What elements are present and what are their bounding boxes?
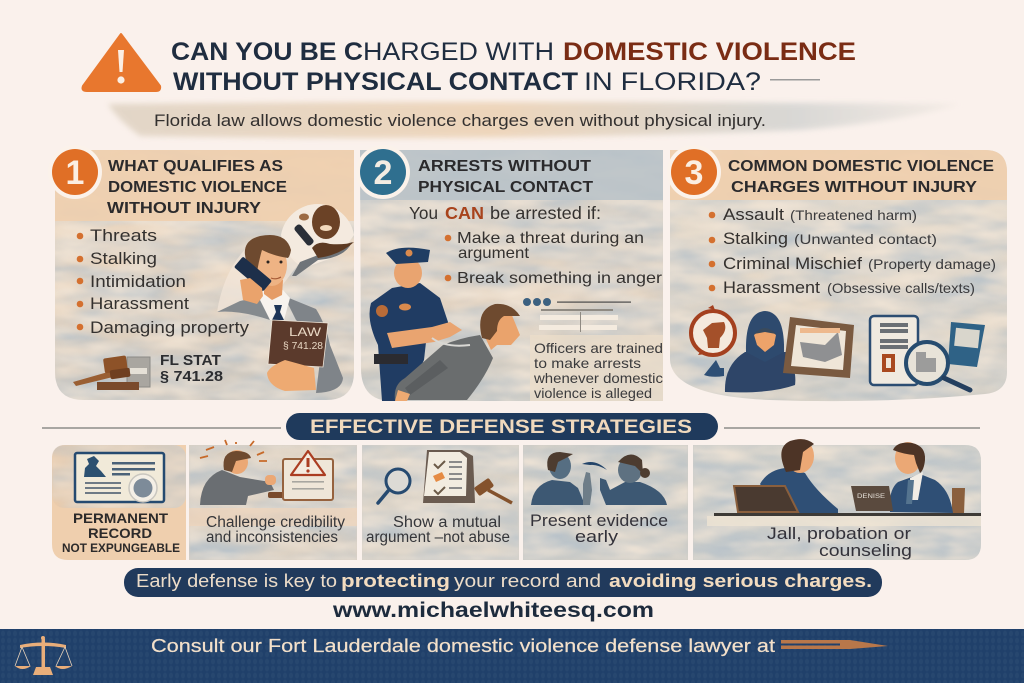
icon: two people talking: [531, 452, 667, 505]
icon: hooded stalker: [725, 311, 795, 392]
heading: CHARGES WITHOUT INJURY: [731, 179, 977, 196]
badge 2: 2: [374, 154, 392, 192]
card: jail, probation or counseling: [693, 439, 981, 560]
subtitle band: [108, 102, 960, 138]
bullet list: Break something in anger: [457, 270, 663, 287]
icon: broken picture frame: [783, 317, 854, 378]
note: officers trained: [530, 335, 663, 401]
card: present evidence: early: [575, 528, 619, 546]
heading: WHAT QUALIFIES AS: [108, 158, 283, 175]
bullet list: Threats: [90, 226, 157, 245]
charges list: Criminal Mischief: [723, 255, 862, 273]
statute: FL STAT: [160, 352, 221, 369]
heading: [418, 158, 593, 196]
icon: record card: [75, 453, 164, 502]
banner: early defense: Early defense is key to: [136, 571, 337, 591]
card: present evidence: [523, 445, 688, 560]
icon: checklist, magnifier and gavel: [378, 450, 512, 503]
charges list: (Property damage): [868, 256, 996, 272]
charges list: Harassment: [723, 279, 820, 297]
charges list: Stalking: [723, 230, 788, 248]
note: officers trained: to make arrests: [534, 355, 641, 371]
note: officers trained: Officers are trained: [534, 340, 663, 356]
bullet list: argument: [458, 245, 530, 262]
illustration: man on the phone with law book: LAW: [289, 325, 322, 339]
footer: [0, 629, 1024, 683]
bullet list: Make a threat during an: [457, 230, 644, 247]
section heading: effective defense strategies: EFFECTIVE DEFENSE STRATEGIES: [310, 416, 692, 438]
card: jail, probation or counseling: Jall, probation or: [767, 525, 912, 543]
charges list: (Obsessive calls/texts): [827, 280, 975, 296]
illustration: lawyer and client at desk: [714, 439, 981, 516]
footer text: Consult our Fort Lauderdale domestic violence defense lawyer at: [151, 636, 775, 656]
bullet list: [445, 230, 663, 287]
icon: gavel and book: [73, 355, 150, 390]
title: HARGED WITH: [363, 38, 554, 66]
charges list: (Unwanted contact): [794, 231, 937, 247]
subtitle: Florida law allows domestic violence charges even without physical injury.: [154, 111, 766, 130]
bullet list: Damaging property: [90, 318, 250, 337]
card: jail, probation or counseling: counseling: [819, 542, 912, 560]
banner: early defense: protecting: [341, 571, 450, 591]
small phone and notes graphic: [523, 298, 631, 332]
heading: DOMESTIC VIOLENCE: [108, 179, 287, 196]
illustration: lawyer and client at desk: DENISE: [857, 494, 885, 500]
card: challenge credibility: [189, 440, 357, 560]
statute: [160, 352, 223, 385]
heading: COMMON DOMESTIC VIOLENCE: [728, 158, 994, 175]
lead-in: CAN: [445, 203, 484, 223]
note: officers trained: violence is alleged: [534, 385, 652, 401]
banner: early defense: avoiding serious charges.: [609, 571, 872, 591]
title: [171, 38, 856, 96]
bullet list: [77, 226, 250, 337]
badge 1: 1: [66, 154, 84, 192]
icon: document, magnifier and phone: [870, 316, 985, 390]
charges list: (Threatened harm): [790, 207, 917, 223]
card: challenge credibility: Challenge credibility: [206, 514, 345, 531]
title: DOMESTIC VIOLENCE: [563, 38, 856, 66]
note: officers trained: whenever domestic: [533, 370, 663, 386]
card: permanent record: PERMANENT: [73, 510, 168, 526]
heading: [728, 158, 994, 196]
title: CAN YOU BE C: [171, 38, 363, 66]
icon: scales of justice: [15, 636, 72, 675]
card: mutual argument: [362, 445, 519, 560]
panel: arrests: [356, 145, 664, 402]
heading: WITHOUT INJURY: [107, 200, 261, 217]
card: permanent record: RECORD: [88, 525, 152, 541]
heading: [107, 158, 287, 217]
bullet list: Stalking: [90, 249, 157, 268]
card: present evidence: Present evidence: [530, 512, 668, 530]
icon: warning triangle: [82, 34, 160, 91]
bullet list: Intimidation: [90, 272, 186, 291]
lead-in: be arrested if:: [490, 203, 601, 223]
title: IN FLORIDA?: [584, 68, 761, 96]
card: challenge credibility: and inconsistencies: [206, 529, 338, 546]
section heading: effective defense strategies: [42, 413, 980, 440]
heading: ARRESTS WITHOUT: [418, 158, 591, 175]
card: permanent record: NOT EXPUNGEABLE: [62, 543, 180, 555]
illustration: man on the phone with law book: § 741.28: [283, 340, 323, 352]
panel: defense strategies: [52, 439, 981, 560]
badge 3: [667, 145, 721, 199]
illustration: officer arresting man: [370, 248, 520, 401]
badge 3: 3: [685, 154, 703, 192]
lead-in: [409, 203, 601, 223]
heading: PHYSICAL CONTACT: [418, 179, 593, 196]
title: WITHOUT PHYSICAL CONTACT: [173, 68, 578, 96]
card: permanent record: [52, 445, 186, 560]
card: mutual argument: Show a mutual: [393, 514, 501, 531]
illustration: accuser in speech bubble: [281, 204, 354, 276]
redacted phone smear: [781, 640, 888, 649]
banner: early defense: [124, 568, 882, 597]
statute: § 741.28: [160, 368, 223, 385]
icon: man pointing at clipboard: [200, 440, 333, 505]
illustration: man on the phone with law book: [217, 235, 343, 393]
lead-in: You: [409, 203, 438, 223]
panel: what qualifies: [48, 145, 360, 402]
charges list: Assault: [723, 206, 784, 224]
badge 1: [48, 145, 102, 199]
website: www.michaelwhiteesq.com: [332, 599, 654, 622]
banner: early defense: your record and: [454, 571, 601, 591]
card: mutual argument: argument –not abuse: [366, 529, 510, 546]
badge 2: [356, 145, 410, 199]
panel: common charges: [667, 145, 1010, 405]
charges list: [709, 206, 996, 297]
bullet list: Harassment: [90, 294, 189, 313]
icon: threat fist bubble: [691, 305, 735, 377]
